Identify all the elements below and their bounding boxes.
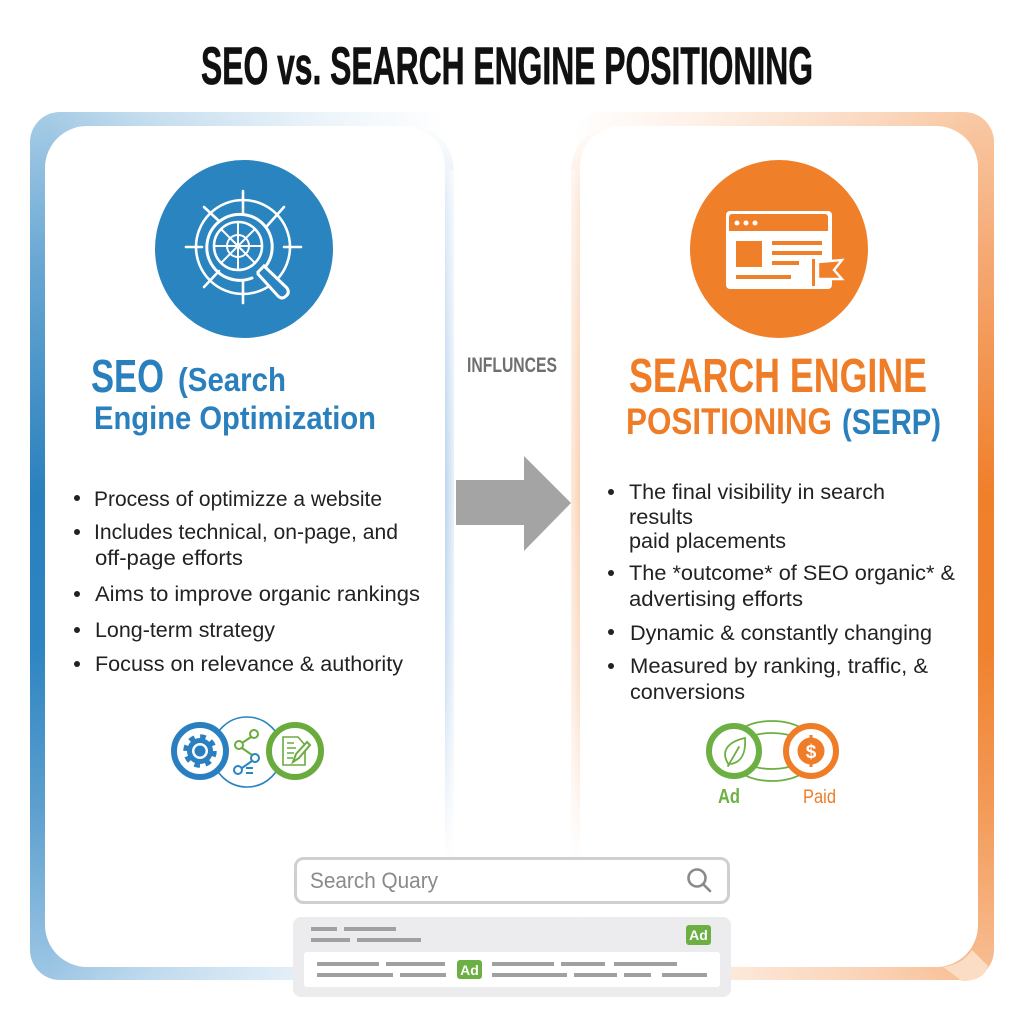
panel frame: orange xyxy=(569,110,996,982)
icon: orange browser page circle xyxy=(690,160,868,338)
bullet list: SERP: conversions xyxy=(630,681,745,704)
bullet list: SERP: The *outcome* of SEO organic* & xyxy=(629,562,955,585)
icon: magnifier xyxy=(688,870,710,891)
icon group: ad and paid xyxy=(709,721,836,808)
arrow: influences xyxy=(456,456,571,551)
heading: search engine positioning: SEARCH ENGINE xyxy=(629,350,927,403)
heading: search engine positioning: POSITIONING xyxy=(626,401,832,442)
bullet list: SERP: advertising efforts xyxy=(629,588,803,611)
bullet list: SEO: Process of optimizze a website xyxy=(94,488,382,511)
bullet list: SEO: Aims to improve organic rankings xyxy=(95,583,420,606)
ad badge: inline: Ad xyxy=(460,962,479,978)
search bar xyxy=(296,858,728,902)
heading: search engine positioning xyxy=(626,350,941,442)
heading: SEO: SEO xyxy=(91,350,164,402)
heading: SEO: (Search xyxy=(178,361,286,398)
bullet list: SERP: Measured by ranking, traffic, & xyxy=(630,655,928,678)
heading: SEO: Engine Optimization xyxy=(94,400,376,436)
label: Paid: Paid xyxy=(803,787,836,808)
bullet list: SERP: results xyxy=(629,506,693,529)
bullet list: SEO: off-page efforts xyxy=(95,547,243,570)
ad badge: top: Ad xyxy=(689,927,708,943)
bullet list: SEO: Focuss on relevance & authority xyxy=(95,653,404,676)
bullet list: SERP: The final visibility in search xyxy=(629,481,885,504)
icon group: ad and paid: $ xyxy=(806,742,817,763)
bullet list: SERP: Dynamic & constantly changing xyxy=(630,622,932,645)
results panel xyxy=(293,917,731,997)
panel: search engine positioning xyxy=(569,110,996,982)
heading: search engine positioning: (SERP) xyxy=(842,403,941,442)
label: Ad: Ad xyxy=(718,786,740,808)
heading: SEO xyxy=(91,350,376,436)
bullet list: SEO: Includes technical, on-page, and xyxy=(94,521,398,544)
icon: blue search web circle xyxy=(155,160,333,338)
bullet list: SEO: Long-term strategy xyxy=(95,619,276,642)
panel frame: blue xyxy=(30,110,456,982)
bullet list: SERP xyxy=(608,481,955,704)
panel: SEO xyxy=(30,110,456,982)
ad badge: inline xyxy=(457,960,482,979)
ad badge: top xyxy=(686,925,711,945)
icon group: SEO gear, network, document xyxy=(174,717,321,787)
bullet list: SERP: paid placements xyxy=(629,530,786,553)
search query text: Search Quary xyxy=(310,868,439,893)
label: influences: INFLUNCES xyxy=(467,354,557,377)
bullet list: SEO xyxy=(74,488,420,676)
